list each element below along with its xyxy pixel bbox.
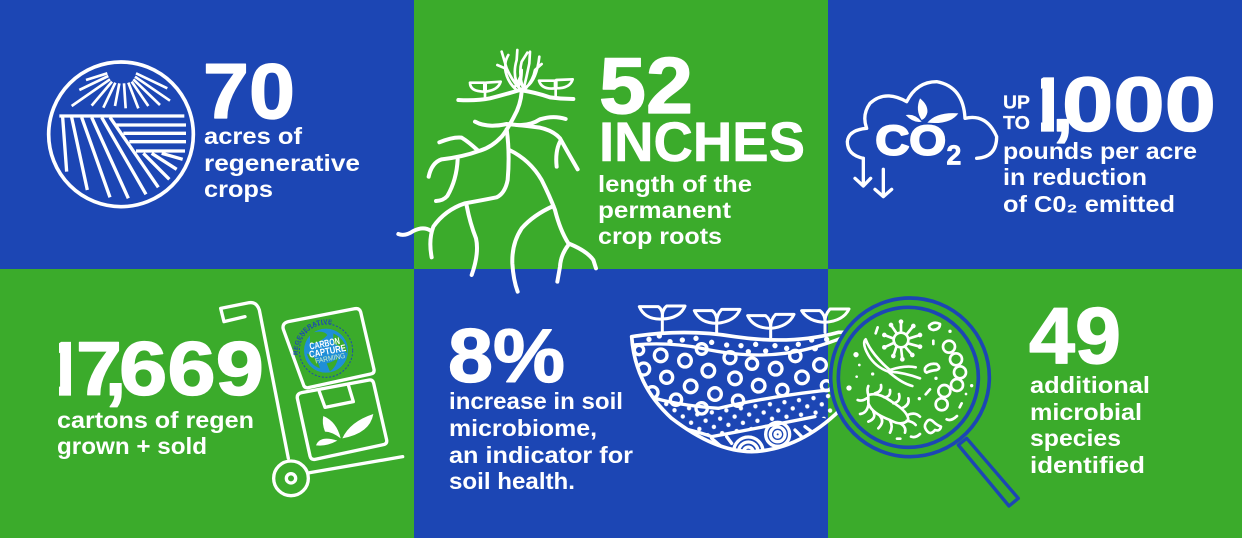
logo: carbon capture farming: FARMING: [314, 351, 346, 366]
text: cartons of regen grown + sold: grown + sold: [57, 433, 207, 459]
text: cartons of regen grown + sold: cartons of regen: [57, 407, 254, 433]
stat: 52: 52: [599, 41, 693, 130]
icon: field and sun in circle: [49, 62, 193, 207]
text: additional microbial species identified: microbial: [1030, 399, 1142, 425]
panel: 70 acres: [49, 47, 360, 207]
text: increase in soil microbiome: increase in soil: [449, 388, 623, 414]
text: additional microbial species identified: [1030, 372, 1150, 478]
stat: 17,669: 669: [119, 327, 264, 412]
icon: magnifying glass with microbes: [831, 298, 1018, 506]
panel: up to 1,000 pounds: [846, 76, 1213, 212]
text: pounds per acre in reduction of CO2 emitted: of C0₂ emitted: [1003, 191, 1175, 217]
label: up to: [1003, 92, 1030, 133]
text: acres of regenerative crops: acres of: [204, 123, 302, 149]
stat: 49: 49: [1029, 291, 1121, 380]
stat: 8%: 8%: [448, 314, 565, 399]
icon: CO2 cloud: [847, 82, 997, 197]
text: additional microbial species identified: identified: [1030, 452, 1145, 478]
label: up to: TO: [1003, 113, 1030, 133]
text: increase in soil microbiome: an indicator for: [449, 442, 633, 468]
panel: 17,669 cartons: [57, 300, 404, 498]
logo: carbon capture farming: REGENERATIVE: [293, 319, 332, 355]
text: pounds per acre in reduction of CO2 emitted: [1003, 138, 1197, 217]
text: additional microbial species identified: species: [1030, 425, 1121, 451]
logo: carbon capture farming: [293, 319, 354, 378]
stat: 17,669: [59, 340, 262, 408]
panel: 49 microbial species: [831, 291, 1150, 506]
label: up to: UP: [1003, 92, 1030, 112]
text: length of the permanent crop roots: [598, 171, 752, 249]
icon: plant roots: [398, 50, 596, 292]
icon: soil cross-section with seedlings: [632, 306, 849, 466]
text: additional microbial species identified: additional: [1030, 372, 1150, 398]
stat: 17,669: 7: [76, 327, 122, 412]
logo: carbon capture farming: CAPTURE: [308, 343, 347, 361]
stat: 17,669: ,: [105, 327, 126, 412]
text: acres of regenerative crops: [204, 123, 360, 202]
stat: 70: 70: [203, 47, 295, 135]
panel: 8% soil microbiome: [448, 306, 849, 494]
text: length of the permanent crop roots: crop roots: [598, 223, 722, 249]
stat: 17,669: 1: [43, 327, 85, 412]
text: length of the permanent crop roots: length of the: [598, 171, 752, 197]
text: acres of regenerative crops: crops: [204, 176, 273, 202]
panel: 52 inches: [398, 41, 805, 292]
text: acres of regenerative crops: regenerative: [204, 150, 360, 176]
text: length of the permanent crop roots: permanent: [598, 197, 731, 223]
stat: 1,000: 1: [1025, 62, 1068, 148]
icon: CO2 cloud: 2: [946, 140, 961, 171]
logo: carbon capture farming: CARBON: [309, 336, 341, 353]
stat: 1,000: 000: [1062, 62, 1216, 148]
text: increase in soil microbiome: microbiome,: [449, 415, 597, 441]
stat: 1,000: [1041, 76, 1213, 144]
stat: 1,000: ,: [1052, 62, 1073, 148]
text: increase in soil microbiome: soil health.: [449, 468, 575, 494]
icon: CO2 cloud: CO: [875, 117, 946, 164]
text: pounds per acre in reduction of CO2 emitted: pounds per acre: [1003, 138, 1197, 164]
seedlings: [639, 306, 849, 338]
stat: inches: INCHES: [599, 110, 805, 173]
text: pounds per acre in reduction of CO2 emitted: in reduction: [1003, 164, 1147, 190]
text: cartons of regen grown + sold: [57, 407, 254, 459]
text: increase in soil microbiome: [449, 388, 633, 494]
icon: hand truck with boxes: [219, 300, 404, 498]
